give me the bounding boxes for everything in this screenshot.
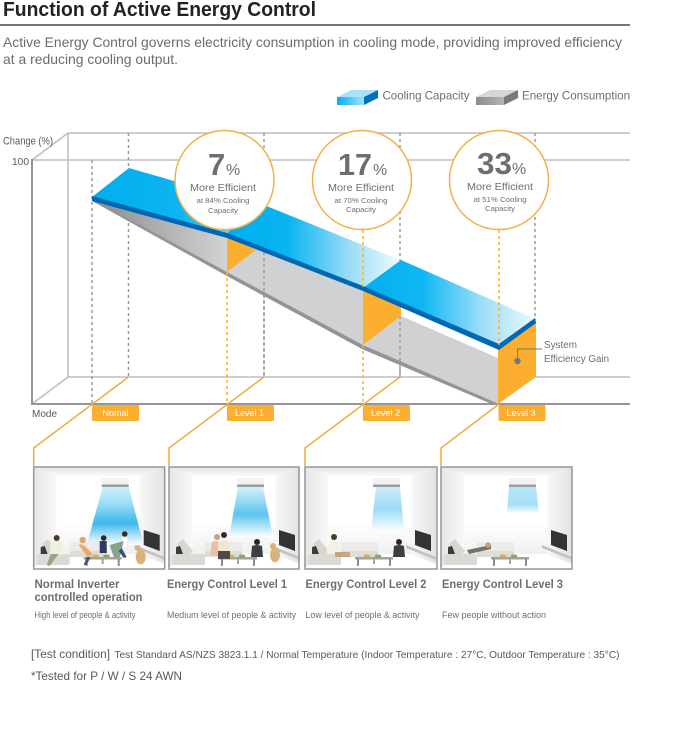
- mode tag: level 3: Level 3: [506, 408, 536, 418]
- annotation: system efficiency gain: Efficiency Gain: [544, 354, 609, 365]
- caption: level 1: Medium level of people & activity: [167, 610, 296, 620]
- callout: 17 percent: More Efficient: [328, 183, 394, 194]
- panel: level 2 room: [305, 467, 436, 569]
- intro text: at a reducing cooling output.: [3, 51, 178, 67]
- callout: 33 percent: Capacity: [485, 204, 515, 213]
- mode tag: level 3: [498, 405, 546, 421]
- test condition: [Test condition]: [31, 647, 110, 661]
- annotation: system efficiency gain: System: [544, 340, 577, 351]
- efficiency gain wedges: [227, 237, 536, 404]
- callout: 7 percent: %: [226, 162, 240, 179]
- panel: level 3 room: [441, 467, 572, 569]
- panel: normal room: [34, 467, 165, 569]
- legend label: energy consumption: Energy Consumption: [522, 88, 630, 102]
- callout: 17 percent: 17: [338, 147, 372, 182]
- panel: level 1 room: [169, 467, 300, 569]
- caption: level 2: [306, 579, 426, 620]
- chart: [3, 130, 630, 466]
- callout: 17 percent: Capacity: [346, 205, 376, 214]
- icon: energy consumption swatch: [476, 90, 518, 105]
- mode tag: level 2: Level 2: [371, 408, 400, 418]
- people and dog: [210, 532, 280, 562]
- energy consumption surface: [92, 199, 499, 405]
- caption: normal: [34, 579, 142, 620]
- intro text: [3, 34, 622, 67]
- caption: level 1: [167, 579, 296, 620]
- mode tag: level 2: [363, 405, 410, 421]
- caption: normal: Normal Inverter: [34, 579, 120, 591]
- axis label: change: Change (%): [3, 136, 53, 148]
- callout: 33 percent: 33: [477, 146, 512, 181]
- people: [326, 534, 405, 557]
- annotation: system efficiency gain: [514, 340, 609, 365]
- axis value: 100: 100: [12, 156, 29, 168]
- callout: 17 percent: at 70% Cooling: [334, 196, 388, 205]
- caption: level 3: Energy Control Level 3: [442, 579, 563, 591]
- callout: 7 percent: Capacity: [208, 206, 238, 215]
- caption: level 1: Energy Control Level 1: [167, 579, 288, 591]
- people and dog: [47, 531, 146, 566]
- callout: 7 percent: 7: [208, 147, 225, 182]
- callout: 33 percent: at 51% Cooling: [474, 195, 526, 204]
- callout: 33 percent: %: [512, 161, 526, 178]
- caption: normal: controlled operation: [34, 592, 142, 604]
- axis label: mode: Mode: [32, 408, 57, 420]
- callout: 33 percent: More Efficient: [467, 182, 533, 193]
- caption: level 3: [442, 579, 563, 620]
- intro text: Active Energy Control governs electricity consumption in cooling mode, providing improved efficiency: [3, 34, 622, 50]
- legend: [337, 88, 630, 105]
- caption: level 2: Energy Control Level 2: [306, 579, 426, 591]
- callout: 33 percent: [450, 130, 548, 230]
- caption: level 2: Low level of people & activity: [306, 610, 420, 620]
- test condition: Test Standard AS/NZS 3823.1.1 / Normal Temperature (Indoor Temperature : 27°C, Outdoor Temperature : 35°C): [114, 649, 620, 661]
- footnote: *Tested for P / W / S 24 AWN: [31, 669, 182, 683]
- mode tag: normal: Nomal: [102, 408, 129, 418]
- person resting: [467, 542, 491, 554]
- caption: normal: High level of people & activity: [34, 610, 136, 620]
- callout: 7 percent: at 84% Cooling: [196, 196, 250, 205]
- legend label: cooling capacity: Cooling Capacity: [382, 88, 470, 102]
- callout: 17 percent: [312, 130, 412, 230]
- icon: cooling capacity swatch: [337, 90, 378, 105]
- cooling capacity surface: [92, 168, 536, 350]
- caption: level 3: Few people without action: [442, 610, 546, 620]
- callout: 7 percent: [175, 130, 274, 230]
- mode tag: level 1: [227, 405, 274, 421]
- mode tag: level 1: Level 1: [235, 408, 264, 418]
- frames: [34, 467, 572, 569]
- callout: 17 percent: %: [373, 162, 387, 179]
- callout: 7 percent: More Efficient: [190, 183, 256, 194]
- mode tag: normal: [92, 405, 139, 421]
- chart grid: [32, 133, 630, 404]
